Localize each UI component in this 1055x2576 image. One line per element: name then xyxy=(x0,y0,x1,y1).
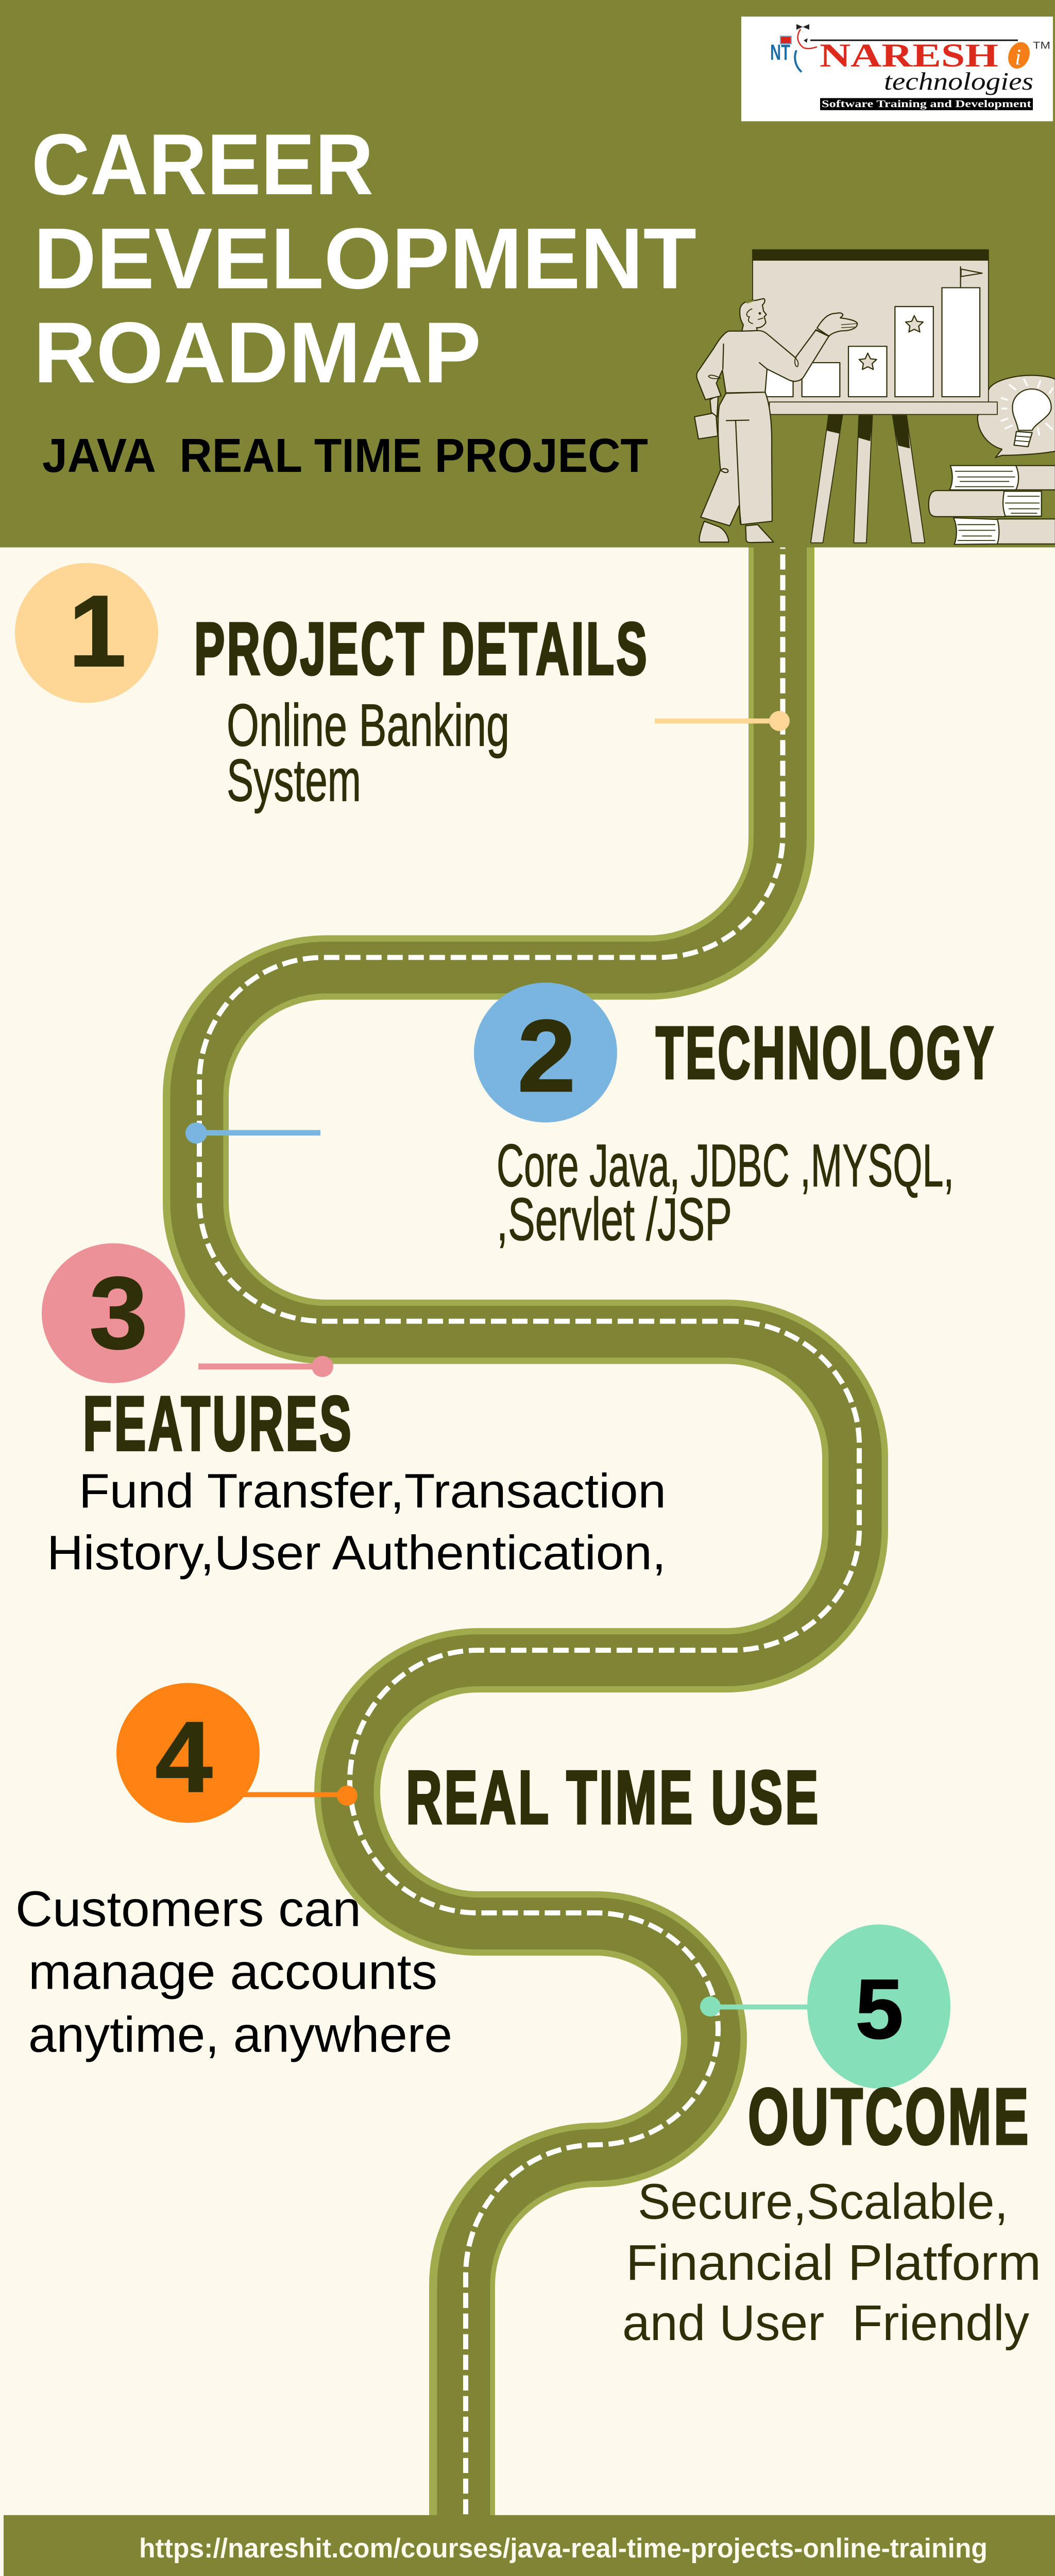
step 3 badge xyxy=(42,1243,185,1383)
logo xyxy=(741,16,1053,121)
footer bar xyxy=(4,2515,1055,2576)
step 1 text: System xyxy=(227,747,361,814)
chart board xyxy=(753,250,997,414)
logo: technologies xyxy=(884,67,1033,95)
subtitle: JAVA REAL TIME PROJECT xyxy=(42,429,648,482)
easel legs xyxy=(811,414,925,543)
step 1 text xyxy=(227,692,509,814)
logo i badge: i xyxy=(1015,45,1021,70)
step 4 badge: 4 xyxy=(155,1701,213,1813)
step 3 text: History,User Authentication, xyxy=(47,1526,666,1580)
step 5 text: and User Friendly xyxy=(622,2295,1030,2351)
step 2 text: ,Servlet /JSP xyxy=(497,1186,732,1253)
step 4 text: manage accounts xyxy=(28,1943,437,1999)
step 3 badge: 3 xyxy=(89,1255,148,1370)
step 4 badge xyxy=(116,1683,260,1823)
logo: NARESH xyxy=(820,38,998,74)
presenter xyxy=(694,299,857,543)
title: ROADMAP xyxy=(33,304,481,401)
step 5 badge xyxy=(807,1924,950,2089)
step 1 text: Online Banking xyxy=(227,692,509,758)
step 4 heading: REAL TIME USE xyxy=(406,1756,821,1840)
step 4 text: anytime, anywhere xyxy=(28,2006,452,2062)
title: CAREER xyxy=(31,116,373,213)
step 3 text xyxy=(47,1464,666,1580)
step 2 connector xyxy=(185,1123,320,1144)
step 1 heading: PROJECT DETAILS xyxy=(194,607,649,690)
step 1 connector xyxy=(655,711,790,731)
step 5 xyxy=(622,1924,1041,2351)
logo mark xyxy=(770,24,817,72)
header panel xyxy=(0,0,1055,547)
logo: Software Training and Development xyxy=(822,98,1032,110)
title xyxy=(31,116,696,401)
logo i badge xyxy=(1005,39,1033,72)
footer url: https://nareshit.com/courses/java-real-time-projects-online-training xyxy=(139,2533,988,2564)
bar chart xyxy=(760,267,982,397)
logo: TM xyxy=(1033,40,1050,52)
step 5 text: Financial Platform xyxy=(626,2234,1041,2291)
illustration: presenter with chart board, bulb and books xyxy=(694,250,1055,545)
step 4 text xyxy=(15,1880,452,2062)
step 1 badge: 1 xyxy=(69,574,126,688)
step 5 connector xyxy=(700,1996,811,2016)
step 2 badge xyxy=(474,982,617,1123)
step 3 text: Fund Transfer,Transaction xyxy=(79,1464,666,1518)
step 2 badge: 2 xyxy=(517,998,576,1113)
title: DEVELOPMENT xyxy=(33,210,696,307)
step 3 xyxy=(42,1243,666,1580)
road xyxy=(196,547,859,2516)
step 5 text: Secure,Scalable, xyxy=(638,2174,1008,2229)
speech bubble with bulb xyxy=(978,376,1055,457)
step 4 text: Customers can xyxy=(15,1880,361,1937)
step 5 badge: 5 xyxy=(855,1962,904,2057)
book stack xyxy=(929,466,1055,545)
step 4 connector xyxy=(242,1786,358,1806)
logo mark: NT xyxy=(770,41,790,65)
step 2 text xyxy=(497,1132,954,1253)
step 3 heading: FEATURES xyxy=(83,1381,353,1467)
step 4 xyxy=(15,1683,821,2062)
step 1 xyxy=(15,563,790,814)
step 3 connector xyxy=(198,1356,333,1377)
step 1 badge xyxy=(15,563,158,703)
step 5 text xyxy=(622,2174,1041,2351)
step 2 xyxy=(185,982,996,1253)
